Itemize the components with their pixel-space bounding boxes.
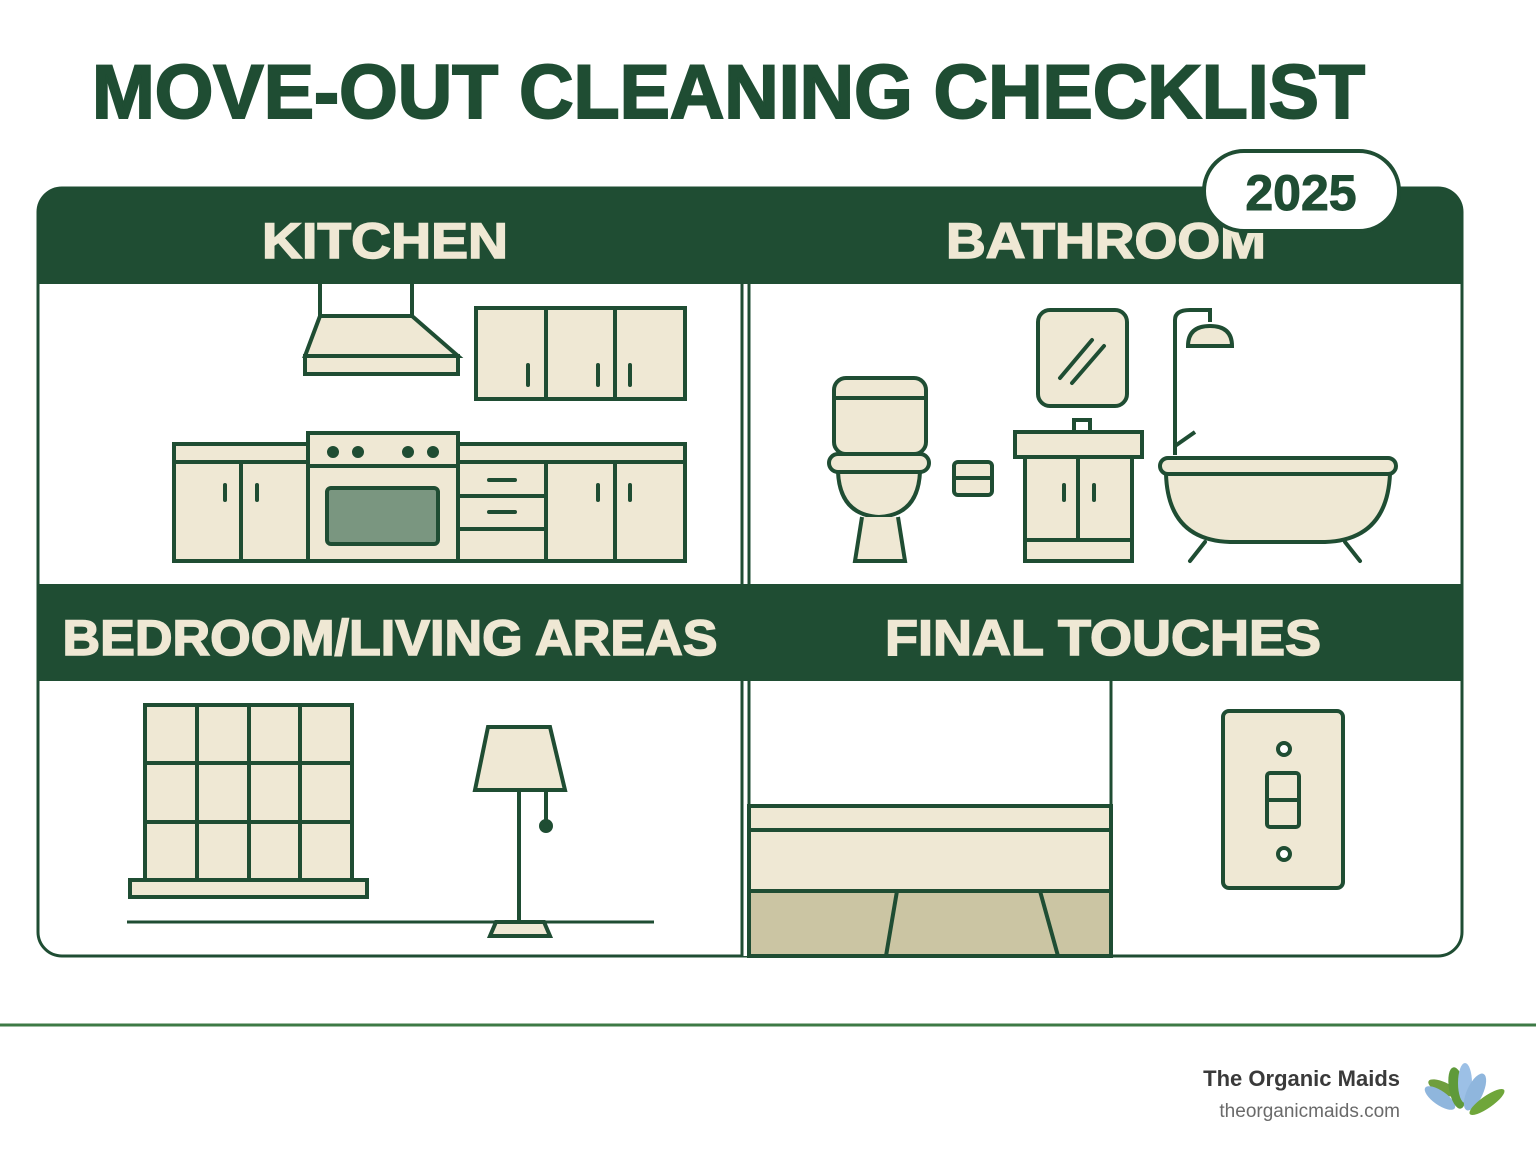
heading: final touches: FINAL TOUCHES: [885, 610, 1321, 666]
logo: lotus leaves: [1421, 1063, 1508, 1119]
illustration: bedroom/living: [127, 705, 654, 936]
footer brand text: theorganicmaids.com: [1219, 1101, 1400, 1122]
illustration: final touches: [749, 681, 1343, 956]
footer brand text: [1203, 1066, 1400, 1122]
footer divider: [0, 1024, 1536, 1026]
footer brand text: The Organic Maids: [1203, 1066, 1400, 1091]
title: MOVE-OUT CLEANING CHECKLIST: [92, 50, 1365, 135]
heading: kitchen: KITCHEN: [262, 213, 508, 269]
illustration: kitchen: [174, 284, 685, 561]
illustration: bathroom: [829, 310, 1396, 561]
badge: 2025: 2025: [1245, 165, 1357, 221]
badge: 2025: [1204, 151, 1399, 231]
heading: bedroom/living: BEDROOM/LIVING AREAS: [62, 610, 718, 666]
panel frame: [38, 188, 1462, 956]
heading: bathroom: BATHROOM: [946, 213, 1266, 269]
